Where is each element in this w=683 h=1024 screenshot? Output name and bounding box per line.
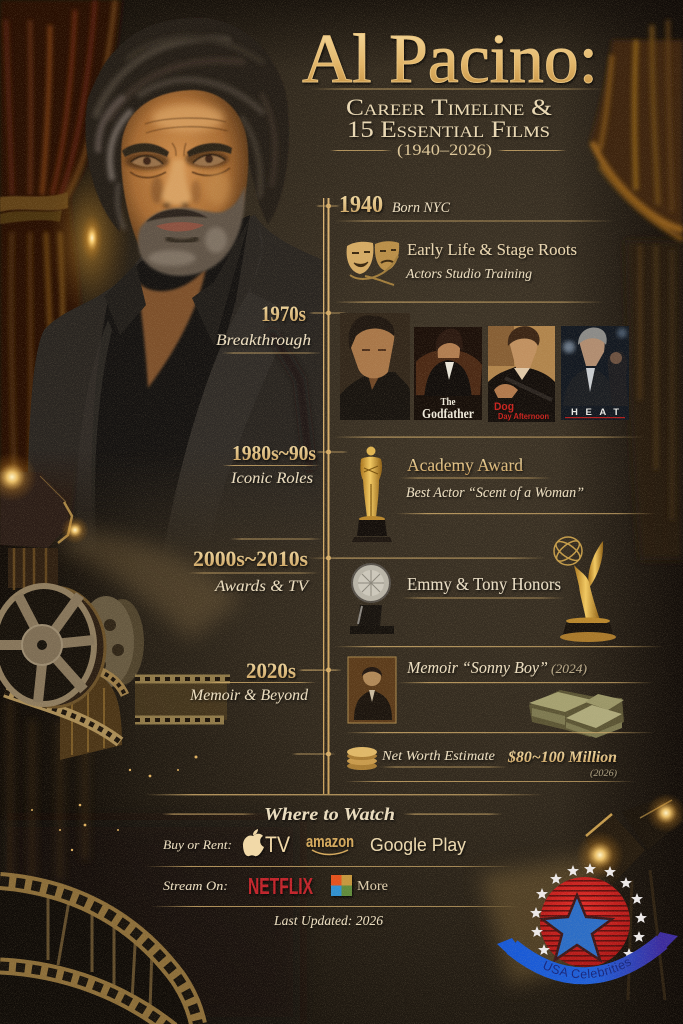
Emmy & Tony text: Emmy & Tony Honors <box>407 574 561 594</box>
Stream On row <box>163 873 388 899</box>
amazon logo <box>306 832 354 854</box>
logo red ball <box>540 877 630 967</box>
memoir text <box>398 658 654 683</box>
divider below posters <box>334 436 644 438</box>
icon: theatre masks <box>347 241 399 285</box>
net worth node connector <box>292 754 336 755</box>
film strip to the right <box>135 679 230 720</box>
right stage curtain <box>590 20 683 560</box>
memoir book cover <box>348 657 396 723</box>
bottom-right spotlight <box>480 793 683 1000</box>
portrait chest <box>138 268 206 388</box>
Academy Award text: Best Actor “Scent of a Woman” <box>406 485 584 501</box>
film strip around reel <box>5 668 125 760</box>
portrait beard highlights <box>148 227 227 266</box>
lower-left curtain folds <box>10 700 85 880</box>
1940 entry: 1940 <box>339 192 383 218</box>
portrait forehead highlight <box>152 104 224 132</box>
1980s-90s label <box>222 441 348 487</box>
portrait eye sockets <box>125 150 229 170</box>
portrait face <box>121 90 248 272</box>
portrait left lapel <box>92 320 112 514</box>
warm glow behind portrait <box>48 158 132 322</box>
2000s-2010s label: Awards & TV <box>214 578 310 595</box>
subtitle date range: (1940–2026) <box>397 142 492 159</box>
1970s label: Breakthrough <box>216 332 311 349</box>
Academy Award text <box>406 455 584 501</box>
icon: Apple logo <box>243 829 264 856</box>
Buy or Rent row <box>163 829 466 857</box>
portrait hair strands <box>96 37 275 228</box>
net worth estimate <box>380 748 617 779</box>
portrait beard <box>138 186 245 276</box>
film poster: Dog Day Afternoon: Dog <box>494 401 514 413</box>
1980s-90s label: Iconic Roles <box>230 470 313 487</box>
1970s label <box>216 301 347 354</box>
divider below rows <box>150 906 520 907</box>
logo ribbon <box>497 932 678 978</box>
divider below net worth <box>345 781 635 782</box>
portrait collar <box>104 218 250 346</box>
bottom-left curved film strip <box>0 880 198 1024</box>
logo ribbon text: USA Celebrities <box>544 959 632 978</box>
film poster: Dog Day Afternoon: Day Afternoon <box>498 411 549 421</box>
icon: Tony award <box>350 564 394 634</box>
amazon logo: amazon <box>306 832 354 851</box>
memoir text: (2024) <box>551 661 587 676</box>
back film reels <box>78 596 144 688</box>
curtain tie-back <box>0 192 68 224</box>
timeline spine <box>323 198 330 794</box>
portrait jacket fold <box>270 330 310 470</box>
portrait right lapel <box>168 334 226 526</box>
portrait hair <box>85 18 289 232</box>
1940 entry <box>316 192 614 222</box>
portrait moustache and mouth <box>146 209 208 242</box>
Apple TV label: TV <box>265 832 290 857</box>
Stream On row: Stream On: <box>163 878 228 893</box>
portrait shirt <box>95 215 250 518</box>
front film reel <box>0 586 105 707</box>
left stage curtain <box>0 0 122 520</box>
divider between rows <box>145 866 515 867</box>
subtitle: Career Timeline & <box>346 95 552 120</box>
icon: Emmy statuette <box>553 537 616 642</box>
early life text <box>405 240 577 281</box>
Netflix logo: NETFLIX <box>248 873 313 899</box>
net worth estimate: (2026) <box>590 768 617 779</box>
film poster: Dog Day Afternoon <box>488 326 555 422</box>
More label: More <box>357 878 388 893</box>
portrait forehead wrinkles <box>145 118 228 156</box>
subtitle: 15 Essential Films <box>347 117 550 142</box>
left spotlight <box>0 452 240 640</box>
portrait cheek highlight <box>206 170 230 206</box>
Academy Award text: Academy Award <box>407 455 523 475</box>
icon: Oscar statuette <box>352 446 392 542</box>
divider above 2000s <box>230 538 322 540</box>
timeline nodes <box>326 204 331 756</box>
portrait nose <box>151 160 201 207</box>
main divider <box>145 794 545 795</box>
net worth estimate: Net Worth Estimate <box>381 748 495 763</box>
USA Celebrities logo <box>497 863 678 984</box>
1940 entry: Born NYC <box>392 200 450 216</box>
logo ring of stars <box>530 863 647 959</box>
Academy Award dividers <box>396 478 656 514</box>
title underline <box>310 88 605 90</box>
Google Play label: Google Play <box>370 835 466 855</box>
logo blue star <box>542 895 612 960</box>
portrait of Al Pacino <box>28 18 323 570</box>
net worth estimate: $80~100 Million <box>507 749 617 766</box>
film photo: portrait <box>340 313 410 420</box>
film poster: The Godfather: The <box>440 396 456 408</box>
subtitle <box>346 95 552 142</box>
film poster: Heat: HEAT <box>571 407 619 418</box>
early life text: Early Life & Stage Roots <box>407 240 577 259</box>
icon: stacks of cash <box>529 690 624 738</box>
early life text: Actors Studio Training <box>405 266 532 281</box>
film poster: Heat <box>561 326 629 420</box>
1970s label: 1970s <box>261 301 306 326</box>
title: Al Pacino: <box>302 21 598 98</box>
Buy or Rent row: Buy or Rent: <box>163 837 232 852</box>
1980s-90s label: 1980s~90s <box>232 441 316 465</box>
More tile icon <box>331 875 352 896</box>
2020s label: Memoir & Beyond <box>189 687 309 704</box>
film poster: The Godfather: Godfather <box>422 407 474 422</box>
divider below cash <box>345 732 655 733</box>
film reels <box>0 586 230 760</box>
portrait body <box>28 215 323 528</box>
Where to Watch heading: Where to Watch <box>264 804 395 824</box>
2000s-2010s label <box>188 546 546 595</box>
divider above 1970s <box>334 302 604 303</box>
film poster: The Godfather <box>414 327 482 422</box>
icon: coin stack <box>347 747 377 770</box>
divider above 2020s <box>334 646 664 647</box>
memoir text: Memoir “Sonny Boy” <box>406 658 548 677</box>
last updated note: Last Updated: 2026 <box>273 914 383 929</box>
2020s label: 2020s <box>246 658 296 683</box>
portrait jacket and shoulders <box>28 216 323 518</box>
gold dust particles <box>31 756 198 851</box>
portrait brows and eyes <box>122 143 232 178</box>
2000s-2010s label: 2000s~2010s <box>193 546 308 571</box>
2020s label <box>189 658 342 704</box>
